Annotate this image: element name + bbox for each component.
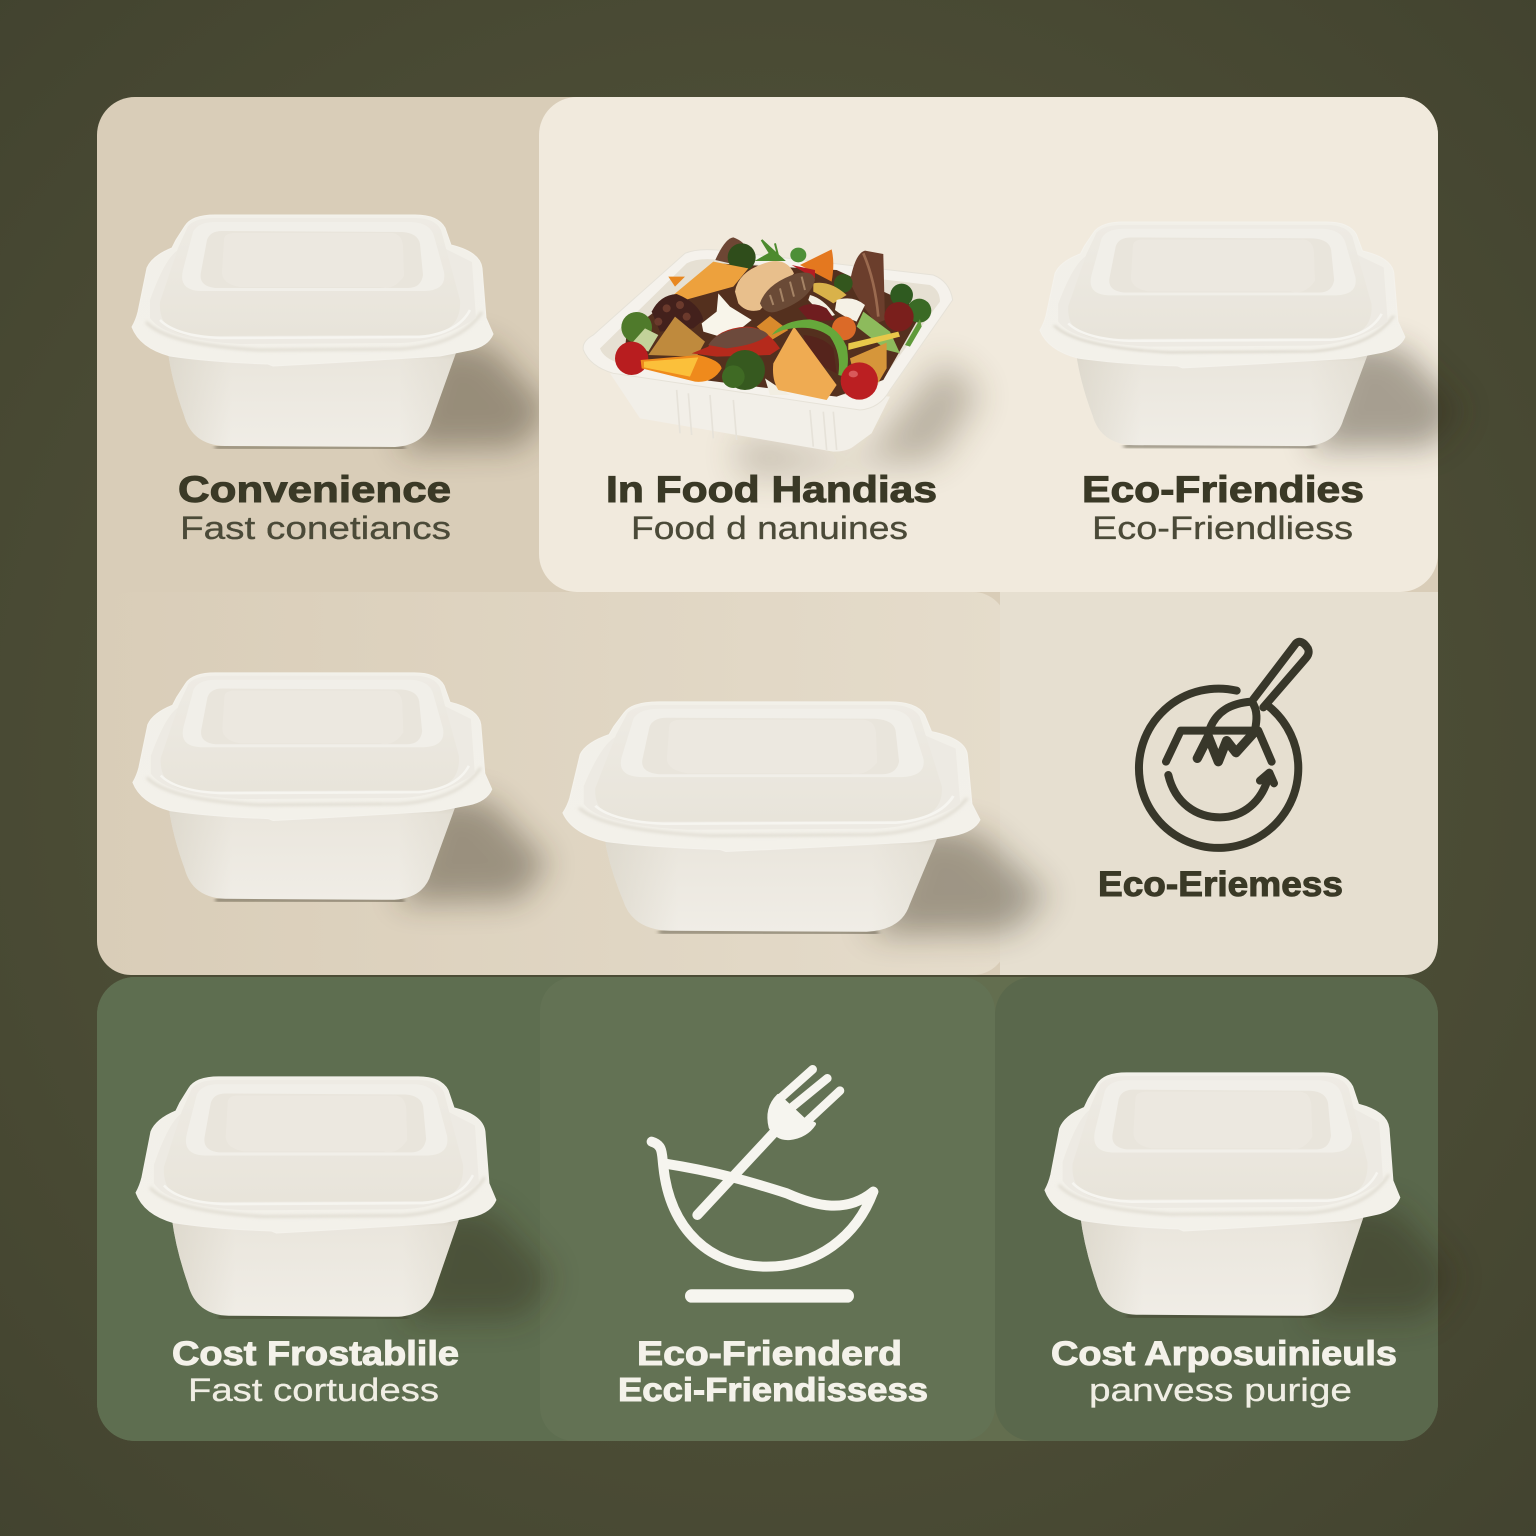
panel: bottom middle cell	[540, 977, 995, 1441]
panel: middle right light	[1000, 592, 1438, 975]
heading: cost frostablile text	[172, 1335, 459, 1408]
food: front items	[615, 319, 878, 400]
panel: top beige base	[97, 97, 1438, 975]
heading: convenience text: Fast conetiancs	[180, 510, 451, 546]
container 3	[133, 673, 548, 903]
container 6	[1045, 1073, 1456, 1319]
heading: in food handias text: Food d nanuines	[631, 510, 908, 546]
container 5	[136, 1077, 553, 1320]
heading: in food handias text: In Food Handias	[606, 469, 937, 510]
heading: cost arposuinieuls text: panvess purige	[1089, 1372, 1352, 1408]
container 1	[132, 215, 550, 450]
panel: middle left beige	[97, 592, 1007, 975]
item: eco-friendly container top right	[1040, 222, 1463, 449]
heading: eco-friendies text: Eco-Friendliess	[1092, 510, 1353, 546]
panel: bottom right cell	[995, 977, 1438, 1441]
heading: eco-eriemess label: Eco-Eriemess	[1098, 865, 1343, 904]
panel: bottom green base	[97, 977, 1438, 1441]
heading: convenience text	[178, 469, 451, 546]
heading: eco-frienderd text	[618, 1335, 928, 1408]
panel: top right card	[539, 97, 1438, 592]
food tray	[583, 237, 980, 473]
heading: cost frostablile text: Fast cortudess	[188, 1372, 439, 1408]
panel: bottom left cell	[97, 977, 597, 1441]
heading: eco-frienderd text: Eco-Frienderd	[637, 1335, 902, 1373]
icon: bowl with fork	[652, 1069, 873, 1296]
container 4	[563, 702, 1046, 935]
heading: eco-frienderd text: Ecci-Friendissess	[618, 1371, 928, 1408]
heading: eco-friendies text: Eco-Friendies	[1082, 469, 1364, 510]
heading: cost arposuinieuls text: Cost Arposuinieuls	[1051, 1335, 1397, 1373]
container 2	[1040, 222, 1463, 449]
heading: cost arposuinieuls text	[1051, 1335, 1397, 1408]
food: middle items	[621, 261, 922, 383]
heading: convenience text: Convenience	[178, 469, 451, 510]
heading: cost frostablile text: Cost Frostablile	[172, 1335, 459, 1373]
heading: eco-friendies text	[1082, 469, 1364, 546]
heading: in food handias text	[606, 469, 937, 546]
food: back items	[668, 237, 931, 331]
icon: plate with spoon and recycling arrow	[1139, 642, 1309, 848]
item: convenience container	[132, 215, 550, 450]
